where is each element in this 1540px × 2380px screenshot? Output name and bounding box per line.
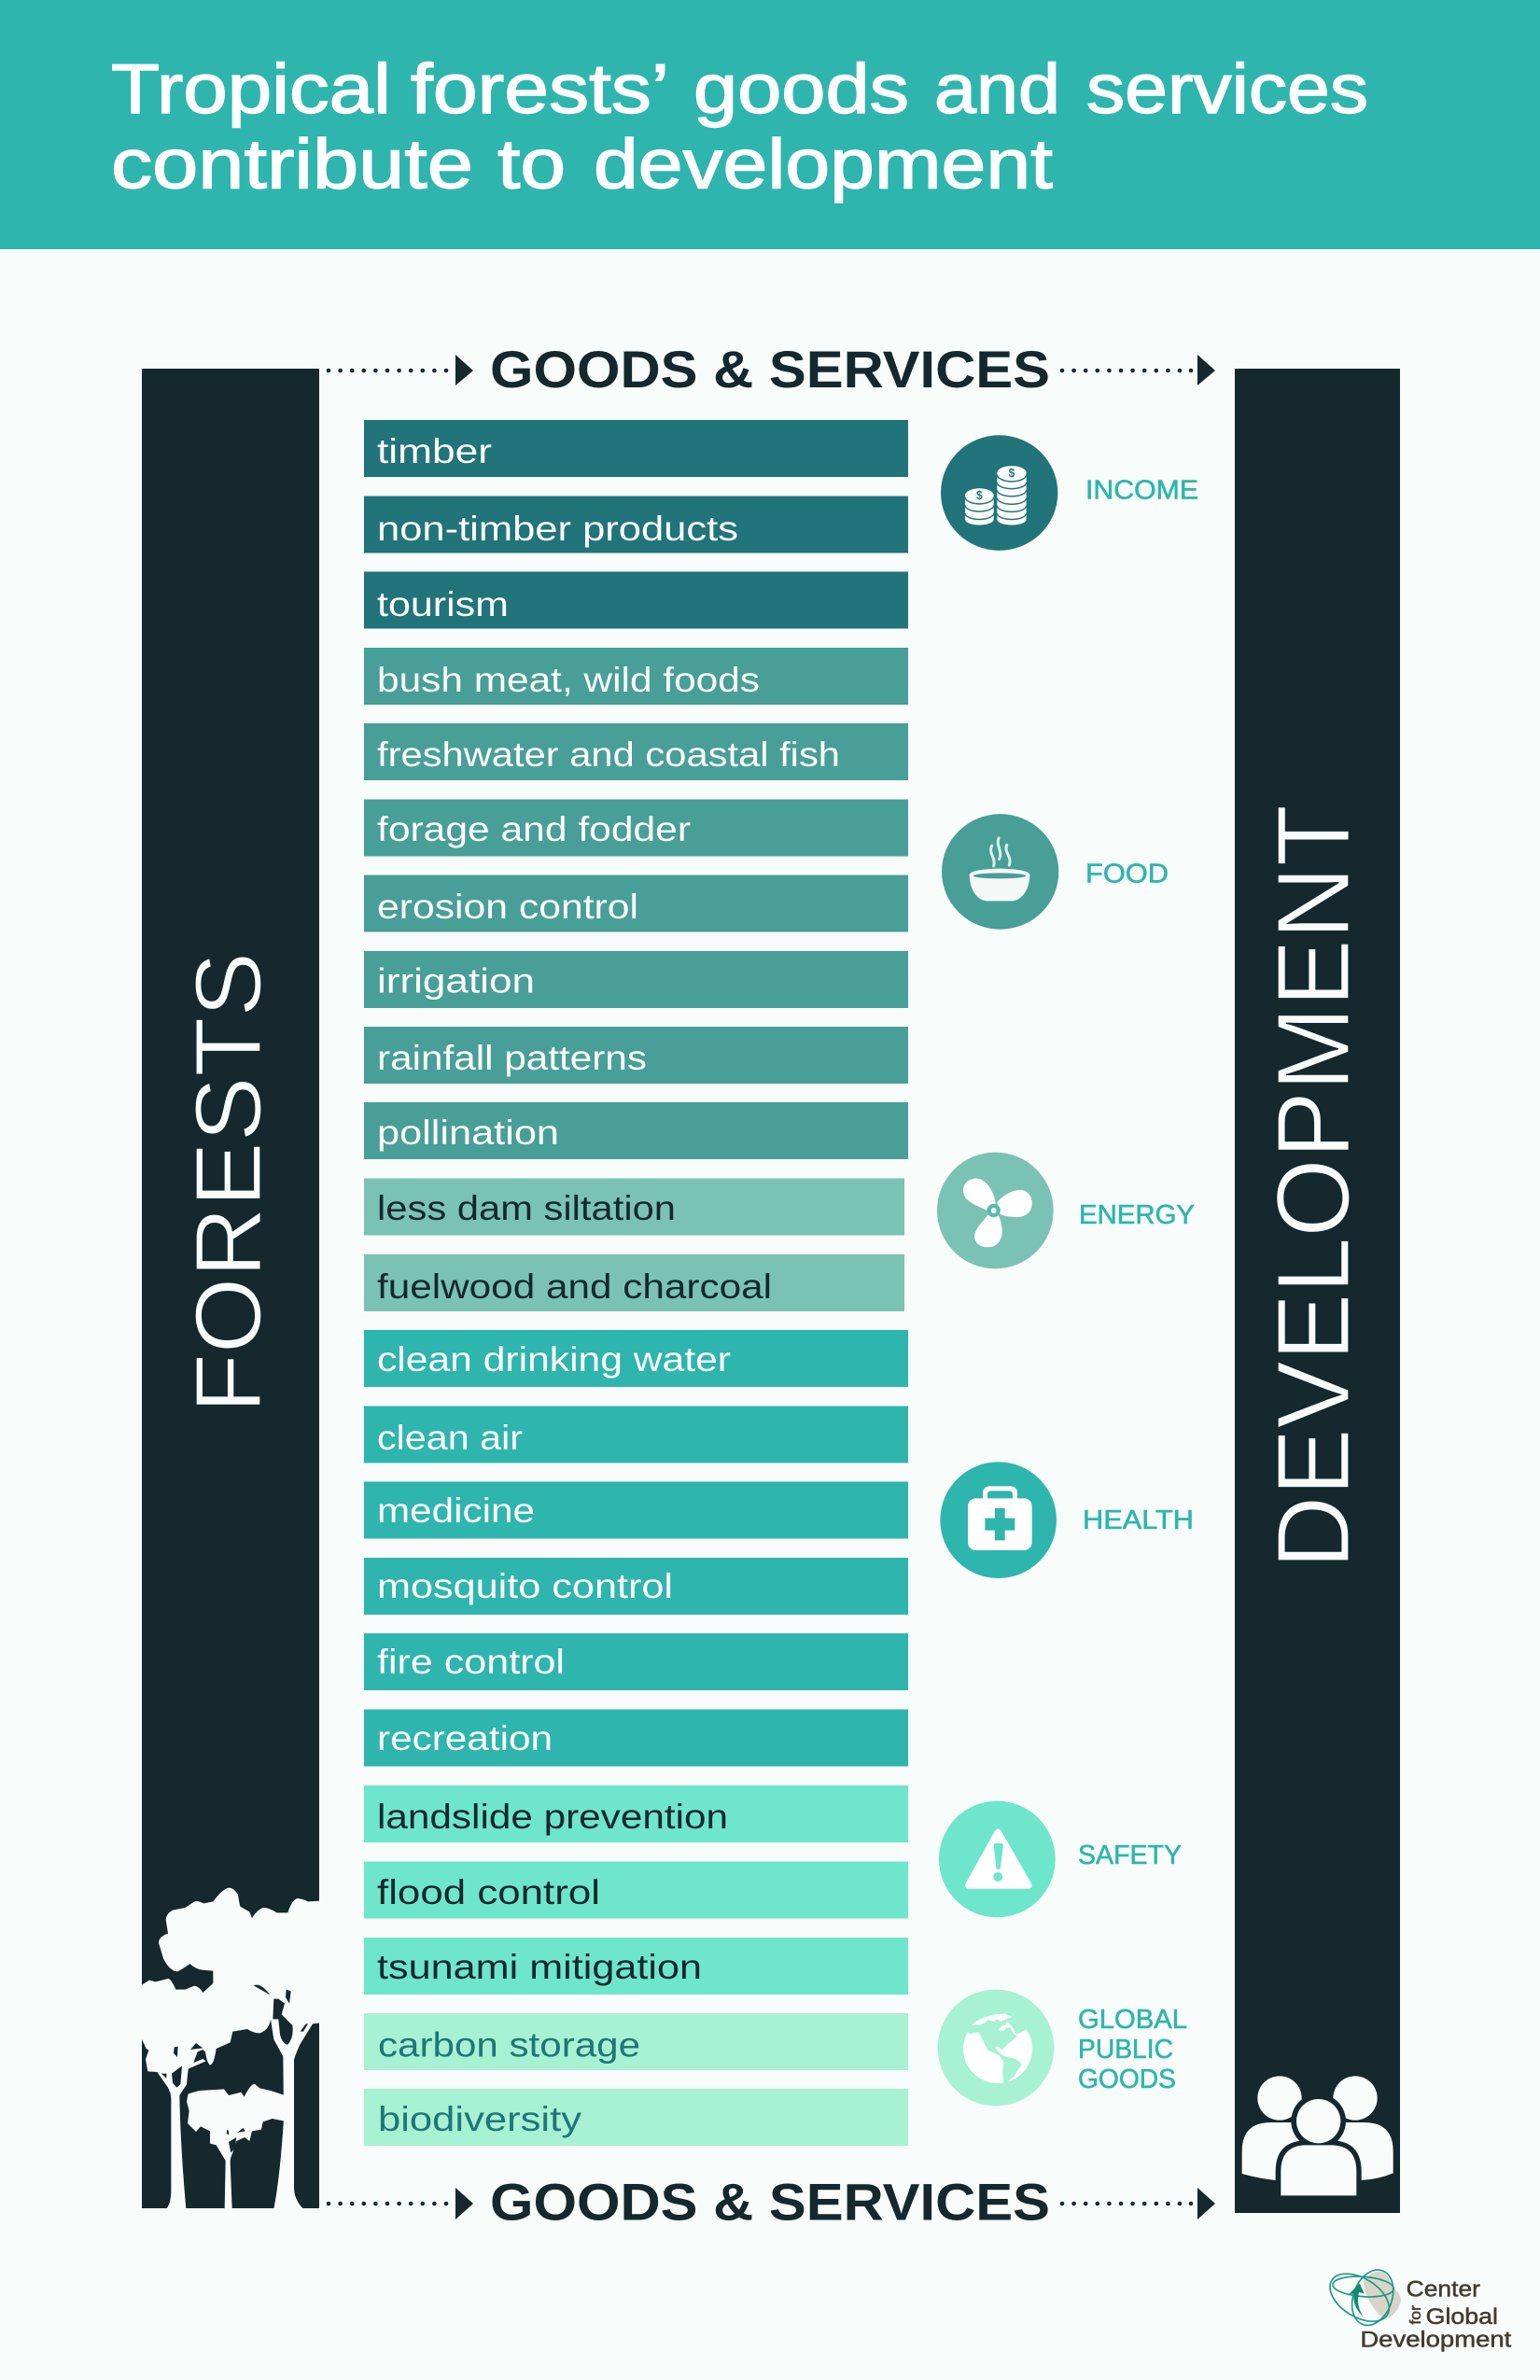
title: forests’ bbox=[411, 49, 669, 128]
bar: mosquito control: mosquito control bbox=[377, 1567, 673, 1605]
icon: medical kit bbox=[940, 1462, 1057, 1578]
bar: clean drinking water: clean drinking water bbox=[377, 1340, 731, 1379]
bar: clean air: clean air bbox=[377, 1419, 523, 1457]
bar: biodiversity bbox=[364, 2089, 908, 2146]
bar: fire control bbox=[364, 1633, 908, 1690]
bar: freshwater and coastal fish bbox=[364, 723, 908, 780]
bar: medicine: medicine bbox=[377, 1491, 535, 1530]
icon: people bbox=[1242, 2076, 1393, 2195]
bar: non-timber products bbox=[364, 497, 908, 553]
icon: globe bbox=[938, 1990, 1054, 2106]
bar: fire control: fire control bbox=[377, 1643, 565, 1681]
title bbox=[111, 49, 1368, 203]
label: global public goods: PUBLIC bbox=[1078, 2035, 1173, 2065]
title banner bbox=[0, 0, 1540, 249]
label: food: FOOD bbox=[1085, 859, 1169, 889]
list of goods and services bars bbox=[364, 420, 908, 2146]
bar: less dam siltation: less dam siltation bbox=[377, 1189, 676, 1227]
arrow: bottom goods and services right bbox=[1060, 2188, 1215, 2219]
bar: carbon storage bbox=[364, 2013, 908, 2070]
label: global public goods: GLOBAL bbox=[1078, 2005, 1187, 2035]
bar: landslide prevention bbox=[364, 1785, 908, 1842]
bar: biodiversity: biodiversity bbox=[378, 2100, 582, 2138]
bar: timber: timber bbox=[377, 432, 492, 470]
bar: bush meat, wild foods bbox=[364, 648, 908, 705]
arrow: bottom goods and services left bbox=[327, 2188, 473, 2219]
category: global public goods bbox=[938, 1990, 1187, 2106]
bar: pollination bbox=[364, 1102, 908, 1159]
bar: flood control bbox=[364, 1861, 908, 1919]
label: global public goods: GOODS bbox=[1078, 2065, 1176, 2094]
bar: bush meat, wild foods: bush meat, wild foods bbox=[377, 661, 760, 699]
logo text: Center bbox=[1407, 2277, 1480, 2303]
icon: coins: $ bbox=[976, 489, 983, 502]
bar: tsunami mitigation bbox=[364, 1938, 908, 1995]
label: global public goods bbox=[1078, 2005, 1187, 2094]
panel: development bbox=[1235, 369, 1400, 2213]
category: energy bbox=[937, 1153, 1195, 1268]
title: development bbox=[594, 125, 1053, 203]
logo mark bbox=[1322, 2264, 1401, 2331]
arrow: top goods and services right bbox=[1060, 355, 1215, 385]
heading: top goods and services: GOODS & SERVICES bbox=[490, 340, 1050, 399]
category: health bbox=[940, 1462, 1194, 1578]
bar: forage and fodder bbox=[364, 799, 908, 857]
panel: forests bbox=[142, 369, 319, 2208]
bar: freshwater and coastal fish: freshwater and coastal fish bbox=[377, 735, 840, 774]
bar: timber bbox=[364, 420, 908, 477]
icon: warning triangle bbox=[939, 1801, 1056, 1917]
bar: recreation bbox=[364, 1710, 908, 1766]
bar: recreation: recreation bbox=[377, 1719, 553, 1757]
bar: fuelwood and charcoal: fuelwood and charcoal bbox=[377, 1267, 772, 1306]
bar: tsunami mitigation: tsunami mitigation bbox=[377, 1948, 702, 1986]
heading: bottom goods and services: GOODS & SERVICES bbox=[490, 2173, 1050, 2231]
bar: tourism: tourism bbox=[377, 585, 509, 623]
bar: non-timber products: non-timber products bbox=[377, 510, 738, 548]
title: goods bbox=[693, 49, 909, 128]
label: health: HEALTH bbox=[1083, 1505, 1194, 1535]
bar: erosion control: erosion control bbox=[377, 888, 638, 926]
title: and bbox=[934, 49, 1060, 128]
icon: trees silhouette bbox=[142, 1888, 320, 2209]
logo text bbox=[1360, 2277, 1512, 2352]
bar: irrigation bbox=[364, 951, 908, 1008]
logo text: for bbox=[1407, 2305, 1424, 2325]
bar: forage and fodder: forage and fodder bbox=[377, 810, 691, 848]
icon: coins bbox=[941, 435, 1057, 551]
icon: bowl bbox=[942, 814, 1058, 930]
arrow: top goods and services left bbox=[327, 355, 473, 385]
icon: fan bbox=[937, 1153, 1054, 1268]
bar: landslide prevention: landslide prevention bbox=[377, 1798, 728, 1836]
bar: less dam siltation bbox=[364, 1178, 904, 1236]
logo text: Global bbox=[1426, 2304, 1498, 2330]
title: contribute bbox=[111, 125, 473, 203]
bar: tourism bbox=[364, 571, 908, 629]
category: income bbox=[941, 435, 1198, 551]
title: Tropical bbox=[111, 49, 391, 128]
title: to bbox=[497, 125, 566, 203]
category: safety bbox=[939, 1801, 1182, 1917]
heading: forests: FORESTS bbox=[176, 952, 281, 1413]
bar: pollination: pollination bbox=[377, 1113, 559, 1152]
bar: carbon storage: carbon storage bbox=[378, 2025, 640, 2065]
bar: flood control: flood control bbox=[377, 1873, 600, 1911]
bar: fuelwood and charcoal bbox=[364, 1254, 904, 1311]
bar: clean drinking water bbox=[364, 1330, 908, 1387]
bar: medicine bbox=[364, 1482, 908, 1538]
bar: rainfall patterns bbox=[364, 1027, 908, 1084]
label: energy: ENERGY bbox=[1079, 1200, 1195, 1230]
title: services bbox=[1086, 49, 1368, 128]
label: income: INCOME bbox=[1085, 476, 1198, 506]
bar: irrigation: irrigation bbox=[377, 961, 535, 1001]
logo text: Development bbox=[1360, 2327, 1512, 2352]
logo: center for global development bbox=[1322, 2264, 1512, 2352]
label: safety: SAFETY bbox=[1078, 1841, 1182, 1870]
heading: development: DEVELOPMENT bbox=[1256, 805, 1371, 1569]
bar: rainfall patterns: rainfall patterns bbox=[377, 1039, 647, 1077]
bar: mosquito control bbox=[364, 1558, 908, 1615]
bar: clean air bbox=[364, 1406, 908, 1463]
category: food bbox=[942, 814, 1169, 930]
icon: coins: $ bbox=[1009, 466, 1015, 480]
bar: erosion control bbox=[364, 875, 908, 931]
